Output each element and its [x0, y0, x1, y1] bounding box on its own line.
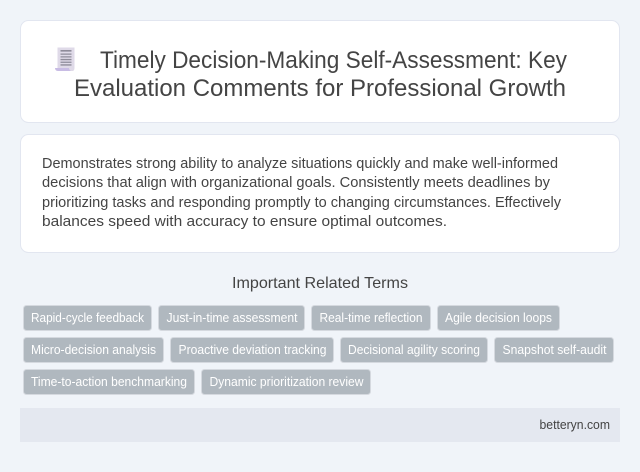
tag: rapid-cycle feedback: Rapid-cycle feedback — [31, 311, 145, 325]
panel: title card — [20, 20, 620, 122]
tag group: related terms — [24, 306, 614, 394]
tag: dynamic prioritization review — [202, 370, 370, 394]
tag: rapid-cycle feedback — [24, 306, 152, 330]
tag: snapshot self-audit: Snapshot self-audit — [502, 343, 607, 357]
tag: proactive deviation tracking: Proactive deviation tracking — [178, 343, 327, 357]
tag: snapshot self-audit — [494, 338, 614, 362]
title: Evaluation Comments for Professional Growth — [74, 75, 566, 102]
text block: summary: prioritizing tasks and responding promptly to changing circumstances. Effectively — [42, 195, 562, 211]
tag: agile decision loops — [438, 306, 560, 330]
tag: micro-decision analysis — [24, 338, 164, 362]
tag: agile decision loops: Agile decision loops — [445, 311, 552, 325]
tag: time-to-action benchmarking: Time-to-action benchmarking — [31, 375, 187, 389]
tag: just-in-time assessment — [158, 306, 304, 330]
tag: dynamic prioritization review: Dynamic prioritization review — [210, 375, 364, 389]
tag: decisional agility scoring — [340, 338, 488, 362]
footer bar — [20, 408, 620, 442]
panel: assessment summary — [20, 134, 620, 252]
icon: document scroll — [55, 48, 74, 71]
text block: summary: Demonstrates strong ability to analyze situations quickly and make well-informed — [42, 156, 558, 172]
tag: micro-decision analysis: Micro-decision analysis — [31, 343, 156, 357]
footer text: betteryn.com: betteryn.com — [540, 418, 610, 432]
tag: proactive deviation tracking — [170, 338, 334, 362]
title — [74, 47, 567, 102]
tag: decisional agility scoring: Decisional agility scoring — [348, 343, 480, 357]
tag: time-to-action benchmarking — [24, 370, 194, 394]
text block: summary: balances speed with accuracy to ensure optimal outcomes. — [42, 214, 447, 230]
title: Timely Decision-Making Self-Assessment: Key — [100, 47, 567, 74]
tag: real-time reflection — [312, 306, 430, 330]
heading: important related terms: Important Related Terms — [232, 275, 408, 292]
text block: summary — [42, 156, 562, 230]
text block: summary: decisions that align with organizational goals. Consistently meets deadlines by — [42, 175, 551, 191]
tag: real-time reflection: Real-time reflection — [320, 311, 423, 325]
tag: just-in-time assessment: Just-in-time assessment — [166, 311, 298, 325]
